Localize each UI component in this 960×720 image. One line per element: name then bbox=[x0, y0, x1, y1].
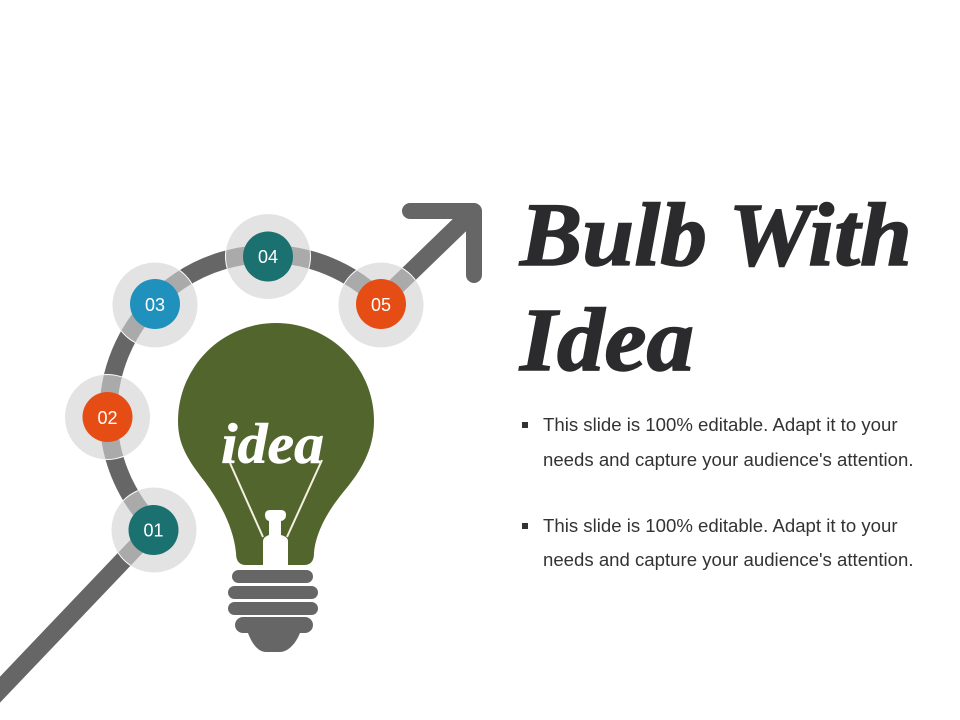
step 02 node: 02 bbox=[97, 408, 118, 428]
text block: second bullet: needs and capture your audience's attention. bbox=[543, 549, 914, 570]
text block: first bullet: This slide is 100% editable. Adapt it to your bbox=[543, 414, 898, 435]
icon: light bulb bbox=[178, 323, 374, 652]
text block: first bullet bbox=[522, 414, 914, 470]
arrow: rising path with arrowhead bbox=[0, 211, 474, 698]
bulb glass bbox=[178, 323, 374, 565]
infographic artwork: bulb and numbered arc path bbox=[0, 202, 908, 702]
screw base bbox=[228, 570, 318, 652]
step 01 node: 01 bbox=[143, 520, 164, 540]
step 05 node bbox=[338, 262, 424, 348]
step 04 node: 04 bbox=[258, 247, 278, 267]
text block: second bullet bbox=[522, 514, 914, 570]
text block: first bullet: needs and capture your audience's attention. bbox=[543, 448, 914, 470]
title: Bulb With bbox=[519, 186, 912, 285]
step 03 node: 03 bbox=[145, 295, 165, 315]
filament wires bbox=[230, 460, 322, 537]
filament stem bbox=[263, 510, 288, 565]
title: Idea bbox=[519, 291, 694, 390]
step 02 node bbox=[65, 374, 150, 460]
step 03 node bbox=[112, 262, 198, 348]
bulb word: idea: idea bbox=[221, 413, 324, 476]
step 05 node: 05 bbox=[371, 295, 391, 315]
arrowhead bbox=[410, 211, 474, 275]
step 01 node bbox=[112, 488, 196, 572]
title bbox=[519, 186, 912, 390]
step 04 node bbox=[225, 214, 311, 299]
text block: second bullet: This slide is 100% editable. Adapt it to your bbox=[543, 514, 898, 536]
